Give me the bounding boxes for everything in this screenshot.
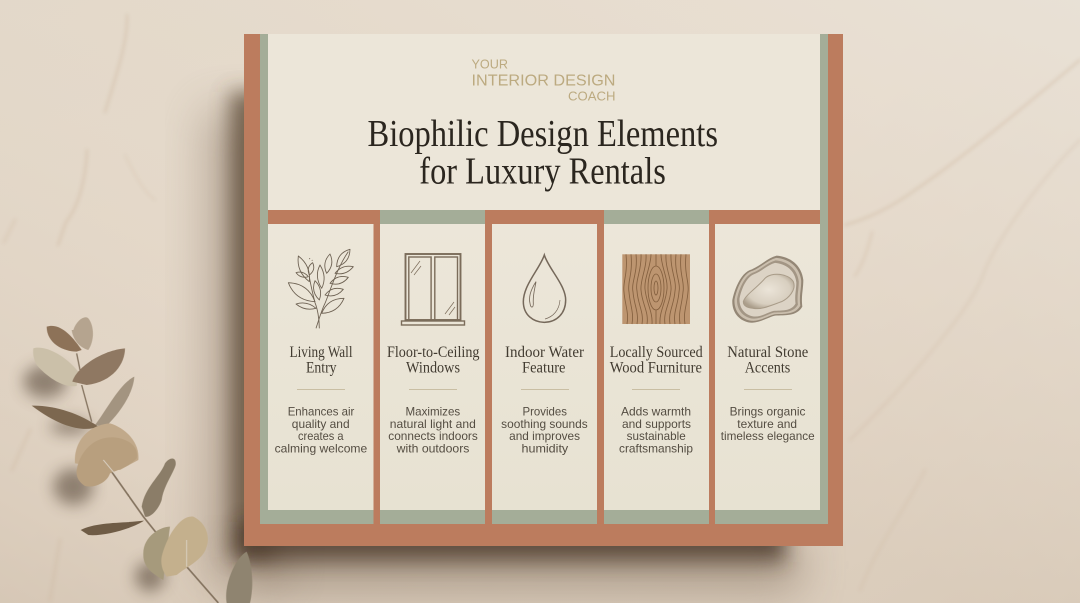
heading xyxy=(290,344,352,376)
description: sustainable xyxy=(627,430,686,443)
description: creates a xyxy=(298,430,344,443)
heading xyxy=(727,344,808,376)
icon: water drop xyxy=(523,255,566,322)
panel: Locally Sourced Wood Furniture xyxy=(604,224,709,510)
heading: Entry xyxy=(306,360,337,376)
heading xyxy=(387,344,480,376)
description: humidity xyxy=(522,442,568,455)
brand logo: COACH xyxy=(568,89,616,103)
description: soothing sounds xyxy=(501,418,588,431)
column separators xyxy=(374,224,715,524)
heading: Wood Furniture xyxy=(610,360,702,376)
icon: leaf sprig xyxy=(288,249,353,328)
description: calming welcome xyxy=(275,442,367,455)
title: for Luxury Rentals xyxy=(419,150,666,192)
description: quality and xyxy=(292,418,350,431)
description: craftsmanship xyxy=(619,442,693,455)
description: with outdoors xyxy=(396,442,470,455)
brand logo xyxy=(472,58,616,103)
heading xyxy=(505,344,585,376)
top cream header panel xyxy=(268,34,820,210)
heading: Windows xyxy=(406,360,460,376)
heading: Living Wall xyxy=(290,344,352,361)
description: and improves xyxy=(509,430,580,443)
brand logo: INTERIOR DESIGN xyxy=(472,72,616,89)
brand logo: YOUR xyxy=(472,58,508,72)
eucalyptus branch xyxy=(23,317,252,603)
poster frame xyxy=(244,34,843,546)
description: natural light and xyxy=(390,418,476,431)
heading xyxy=(610,344,703,376)
icon: window xyxy=(402,254,464,325)
description: connects indoors xyxy=(388,430,478,443)
description xyxy=(721,406,815,443)
panel: Floor-to-Ceiling Windows xyxy=(380,224,485,510)
description: and supports xyxy=(622,418,691,431)
description: Brings organic xyxy=(730,406,806,418)
description: Maximizes xyxy=(406,406,460,418)
description: Provides xyxy=(522,406,567,418)
title xyxy=(368,113,718,192)
icon: stone xyxy=(732,256,803,323)
icon: wood grain xyxy=(622,254,690,324)
column header strip xyxy=(268,210,820,224)
description: Enhances air xyxy=(288,406,354,418)
description xyxy=(388,406,478,455)
description xyxy=(275,406,367,455)
heading: Natural Stone xyxy=(727,344,808,361)
heading: Floor-to-Ceiling xyxy=(387,344,480,361)
title: Biophilic Design Elements xyxy=(368,113,718,155)
description: Adds warmth xyxy=(621,406,691,418)
description: timeless elegance xyxy=(721,430,815,443)
panel: Living Wall Entry xyxy=(268,224,374,510)
heading: Indoor Water xyxy=(505,344,585,361)
description: texture and xyxy=(737,418,797,431)
heading: Locally Sourced xyxy=(610,344,703,361)
description xyxy=(619,406,693,455)
heading: Feature xyxy=(522,360,566,376)
description xyxy=(501,406,588,455)
heading: Accents xyxy=(745,360,790,376)
poster drop shadow xyxy=(205,92,800,590)
panel: Natural Stone Accents xyxy=(715,224,820,510)
panel: Indoor Water Feature xyxy=(492,224,597,510)
